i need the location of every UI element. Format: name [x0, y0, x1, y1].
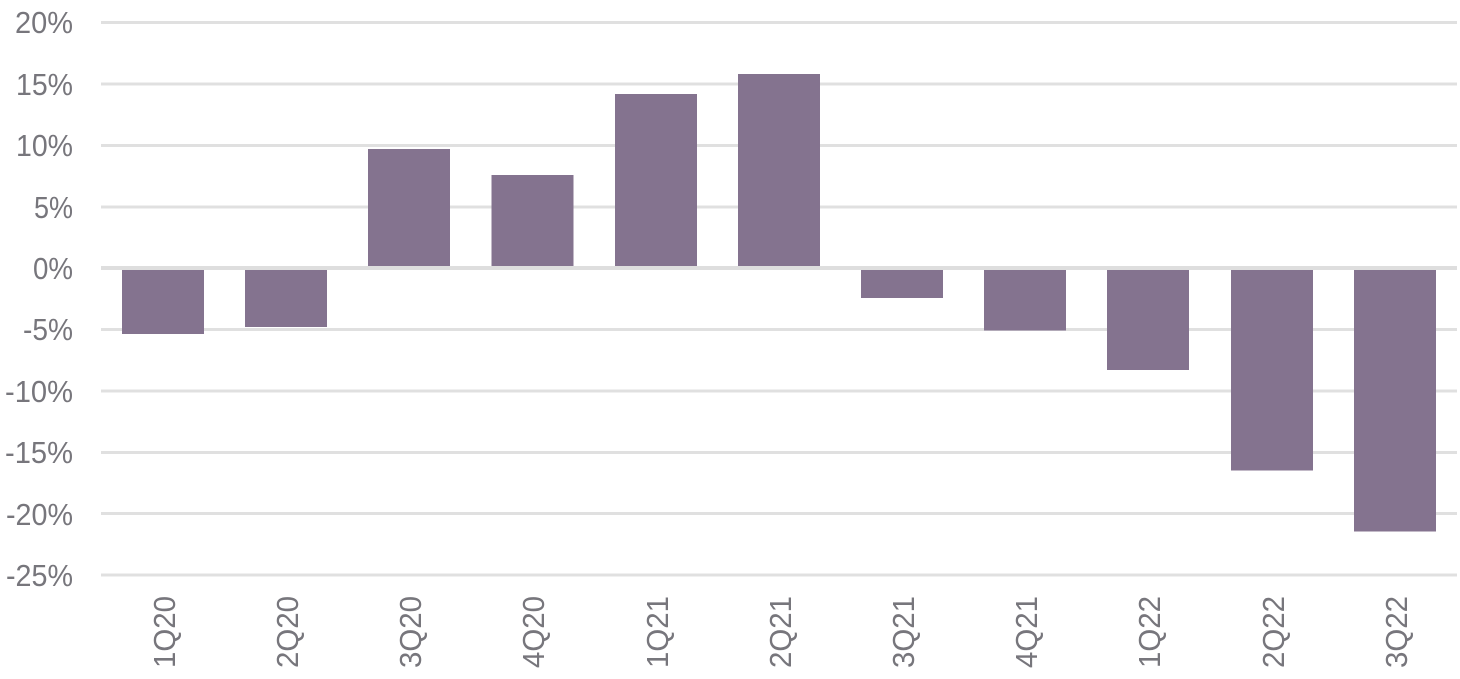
x-axis quarter labels: 3Q20 [393, 596, 428, 668]
y-axis labels: -25% [6, 558, 73, 593]
x-axis quarter labels: 3Q21 [886, 596, 921, 668]
x-axis quarter labels: 2Q22 [1256, 596, 1291, 668]
x-axis quarter labels [147, 596, 1414, 668]
y-axis labels: 0% [33, 251, 73, 286]
x-axis quarter labels: 1Q21 [640, 596, 675, 668]
x-axis quarter labels: 4Q20 [516, 596, 551, 668]
y-axis labels: 20% [15, 5, 73, 40]
x-axis quarter labels: 2Q21 [763, 596, 798, 668]
y-axis labels: 5% [34, 190, 73, 225]
x-axis quarter labels: 1Q22 [1132, 596, 1167, 668]
bars [122, 74, 1436, 532]
y-axis labels [5, 5, 73, 593]
x-axis quarter labels: 2Q20 [270, 596, 305, 668]
y-axis labels: -20% [6, 497, 73, 532]
x-axis quarter labels: 1Q20 [147, 596, 182, 668]
x-axis quarter labels: 4Q21 [1009, 596, 1044, 668]
y-axis labels: -15% [5, 435, 73, 470]
zero baseline [101, 266, 1457, 270]
y-axis labels: -10% [5, 374, 73, 409]
y-axis labels: 15% [16, 67, 73, 102]
y-axis labels: -5% [23, 312, 73, 347]
y-axis labels: 10% [16, 128, 73, 163]
x-axis quarter labels: 3Q22 [1379, 596, 1414, 668]
